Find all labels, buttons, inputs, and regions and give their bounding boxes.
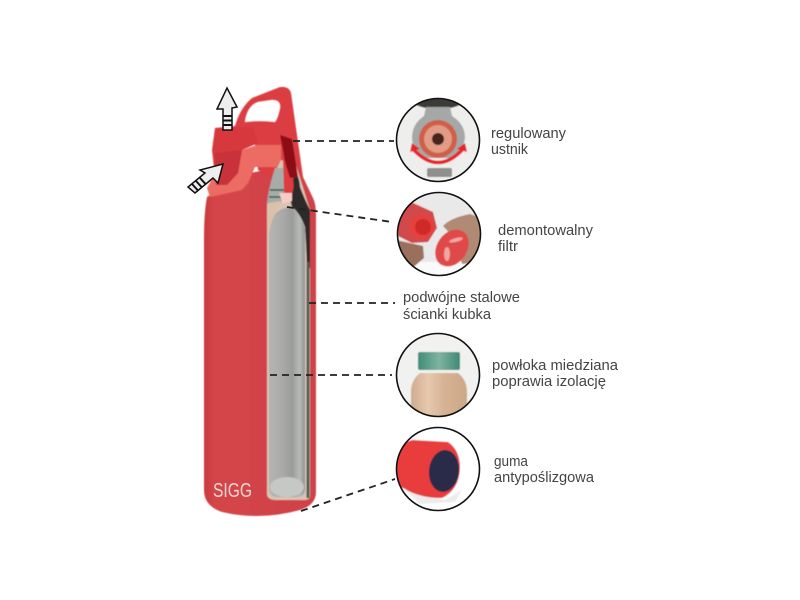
label: copper coating	[492, 358, 619, 390]
cap front collar	[207, 145, 281, 197]
circle: anti-slip rubber	[396, 427, 480, 511]
flask base	[270, 477, 304, 497]
label: anti-slip rubber: guma	[494, 454, 529, 470]
bottle cap	[398, 202, 437, 243]
arrow: pull up	[217, 88, 237, 130]
circle: copper coating	[396, 333, 480, 420]
label: double steel walls	[403, 290, 520, 323]
dark right wall	[306, 262, 310, 498]
label: anti-slip rubber	[494, 454, 595, 486]
label: double steel walls: podwójne stalowe	[403, 290, 520, 306]
outer wall cross-section	[267, 160, 310, 500]
cap interior cutout	[280, 135, 298, 178]
bottle	[204, 87, 316, 516]
orange nozzle	[419, 120, 457, 158]
clasp	[427, 168, 452, 177]
arrow: press in	[188, 164, 223, 193]
handle opening	[245, 100, 280, 122]
outline	[398, 192, 480, 276]
red rotate arrow	[413, 149, 463, 162]
label: copper coating: poprawia izolację	[492, 374, 606, 390]
circle: mouthpiece	[395, 91, 481, 182]
outline	[396, 334, 480, 416]
label: removable filter: demontowalny	[498, 223, 594, 239]
red base	[396, 440, 460, 498]
beige inner liner	[268, 201, 282, 235]
label: removable filter	[498, 223, 594, 255]
cutaway window	[267, 135, 310, 500]
label: adjustable mouthpiece: ustnik	[491, 142, 529, 158]
outline	[396, 428, 480, 510]
navy rubber pad	[428, 450, 460, 492]
bottle cap and handle	[215, 87, 303, 185]
dark top	[416, 99, 460, 108]
red valve body	[283, 160, 296, 195]
inner steel flask	[269, 208, 305, 497]
grey housing	[412, 107, 465, 158]
label: adjustable mouthpiece	[491, 126, 567, 158]
lid shade	[215, 150, 242, 185]
label: adjustable mouthpiece: regulowany	[491, 126, 567, 142]
copper shoulder	[411, 373, 467, 420]
valve seal	[279, 193, 292, 204]
flip lid	[212, 127, 258, 185]
label: copper coating: powłoka miedziana	[492, 358, 619, 374]
dark insulation wall	[290, 173, 310, 268]
threaded neck	[267, 168, 284, 204]
filter disk	[434, 229, 470, 267]
fingers	[398, 240, 424, 266]
bottle body	[204, 165, 316, 516]
logo: SIGG	[213, 480, 252, 502]
green thread	[418, 352, 460, 370]
label: anti-slip rubber: antypoślizgowa	[494, 470, 595, 486]
leader lines	[270, 141, 395, 511]
circle: filter	[396, 192, 482, 276]
label: removable filter: filtr	[498, 239, 518, 255]
base shadow	[405, 490, 462, 504]
label: double steel walls: ścianki kubka	[403, 307, 492, 323]
outline	[396, 98, 480, 182]
